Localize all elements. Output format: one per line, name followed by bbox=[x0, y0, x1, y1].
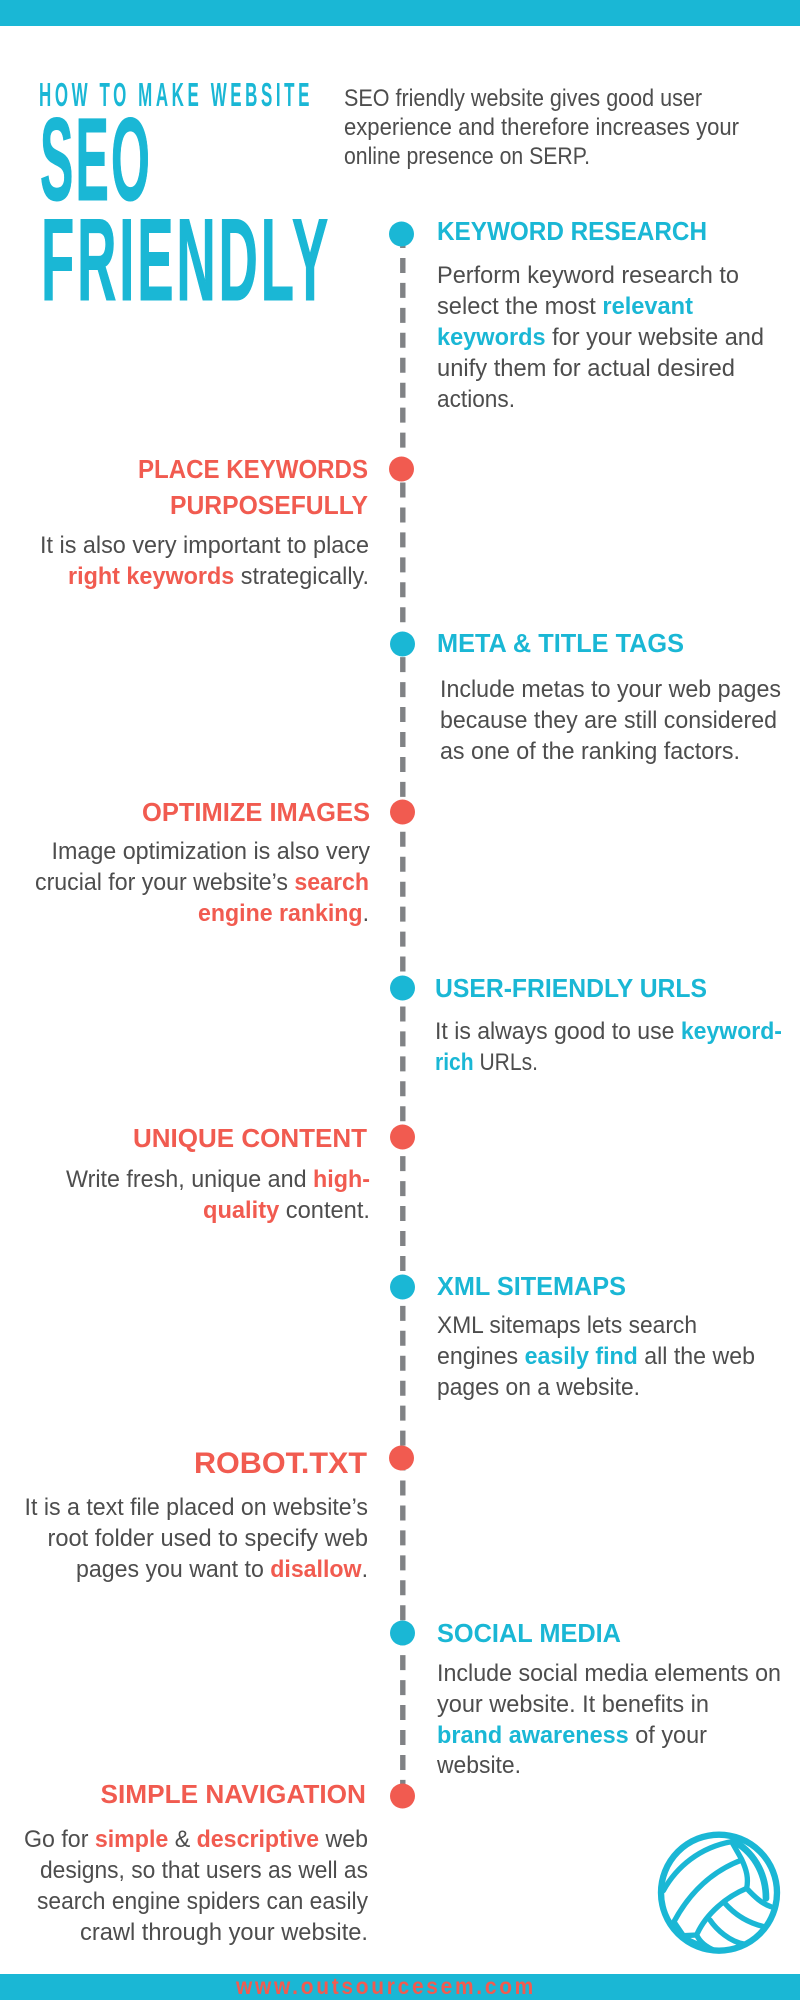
icon: volleyball bbox=[661, 1835, 777, 1951]
body text: XML sitemaps lets search bbox=[437, 1312, 697, 1339]
body text: keywords for your website and bbox=[437, 324, 764, 351]
heading: PLACE KEYWORDS bbox=[138, 454, 368, 484]
heading: UNIQUE CONTENT bbox=[133, 1123, 367, 1153]
heading: SIMPLE NAVIGATION bbox=[100, 1779, 366, 1809]
body text: pages you want to disallow. bbox=[76, 1556, 368, 1583]
body text: as one of the ranking factors. bbox=[440, 738, 740, 765]
step: place keywords purposefully bbox=[40, 454, 414, 590]
body text: your website. It benefits in bbox=[437, 1691, 709, 1718]
heading: USER-FRIENDLY URLS bbox=[435, 973, 707, 1003]
step: keyword research bbox=[389, 216, 764, 413]
body text bbox=[440, 676, 781, 765]
footer url: www.outsourcesem.com bbox=[235, 1973, 536, 1999]
body text: because they are still considered bbox=[440, 707, 777, 734]
intro text: SEO friendly website gives good user bbox=[344, 85, 702, 112]
step: user-friendly urls bbox=[390, 973, 782, 1076]
title: how to make website: HOW TO MAKE WEBSITE bbox=[39, 76, 313, 113]
body text: Write fresh, unique and high- bbox=[66, 1166, 370, 1193]
title block: SEO bbox=[40, 94, 152, 226]
body text: website. bbox=[436, 1752, 521, 1779]
heading: META & TITLE TAGS bbox=[437, 628, 684, 658]
title block bbox=[39, 76, 331, 325]
heading: SOCIAL MEDIA bbox=[437, 1618, 621, 1648]
body text: actions. bbox=[437, 386, 515, 413]
dot bbox=[390, 632, 415, 656]
body text: It is always good to use keyword- bbox=[435, 1018, 782, 1045]
dot bbox=[390, 976, 415, 1000]
body text: pages on a website. bbox=[437, 1374, 640, 1401]
body text bbox=[24, 1826, 368, 1946]
body text: It is a text file placed on website’s bbox=[24, 1494, 368, 1521]
body text bbox=[24, 1494, 368, 1583]
body text bbox=[435, 1018, 782, 1076]
body text: right keywords strategically. bbox=[68, 563, 369, 590]
step: robot.txt bbox=[24, 1446, 414, 1583]
body text: engine ranking. bbox=[198, 900, 369, 927]
step: meta and title tags bbox=[390, 628, 781, 765]
step: social media bbox=[390, 1618, 781, 1779]
dot bbox=[389, 456, 414, 482]
dashed timeline bbox=[400, 233, 405, 1796]
step: optimize images bbox=[35, 797, 415, 927]
body text bbox=[40, 532, 369, 590]
body text: quality content. bbox=[203, 1197, 370, 1224]
body text: Include metas to your web pages bbox=[440, 676, 781, 703]
body text bbox=[436, 1660, 781, 1779]
body text: search engine spiders can easily bbox=[37, 1888, 368, 1915]
step: simple navigation bbox=[24, 1779, 415, 1946]
top bar bbox=[0, 0, 800, 26]
heading: KEYWORD RESEARCH bbox=[437, 216, 707, 246]
body text: Include social media elements on bbox=[437, 1660, 781, 1687]
step: xml sitemaps bbox=[390, 1271, 755, 1401]
dot bbox=[390, 1784, 415, 1808]
body text: crucial for your website’s search bbox=[35, 869, 369, 896]
body text: crawl through your website. bbox=[80, 1919, 368, 1946]
dot bbox=[389, 222, 414, 246]
body text: Perform keyword research to bbox=[437, 262, 739, 289]
body text: Image optimization is also very bbox=[52, 838, 370, 865]
body text bbox=[35, 838, 370, 927]
dot bbox=[389, 1446, 414, 1470]
body text: rich URLs. bbox=[435, 1049, 538, 1076]
body text: root folder used to specify web bbox=[48, 1525, 368, 1552]
step: unique content bbox=[66, 1123, 415, 1224]
dot bbox=[390, 1274, 415, 1300]
heading: XML SITEMAPS bbox=[437, 1271, 626, 1301]
body text: unify them for actual desired bbox=[437, 355, 735, 382]
heading bbox=[138, 454, 368, 520]
body text: brand awareness of your bbox=[437, 1722, 707, 1749]
body text bbox=[437, 1312, 755, 1401]
dot bbox=[390, 1124, 415, 1150]
body text: It is also very important to place bbox=[40, 532, 369, 559]
dot bbox=[390, 1620, 415, 1646]
heading: ROBOT.TXT bbox=[194, 1447, 367, 1480]
body text bbox=[66, 1166, 370, 1224]
intro text: online presence on SERP. bbox=[344, 143, 590, 170]
dot bbox=[390, 800, 415, 824]
body text: select the most relevant bbox=[437, 293, 693, 320]
intro text: experience and therefore increases your bbox=[344, 114, 739, 141]
intro text bbox=[344, 85, 739, 170]
body text bbox=[437, 262, 764, 413]
bottom bar bbox=[0, 1974, 800, 2000]
heading: OPTIMIZE IMAGES bbox=[142, 797, 370, 827]
body text: Go for simple & descriptive web bbox=[24, 1826, 368, 1853]
text: FRIENDLY bbox=[41, 194, 331, 325]
body text: designs, so that users as well as bbox=[40, 1857, 368, 1884]
body text: engines easily find all the web bbox=[437, 1343, 755, 1370]
heading: PURPOSEFULLY bbox=[170, 490, 368, 520]
